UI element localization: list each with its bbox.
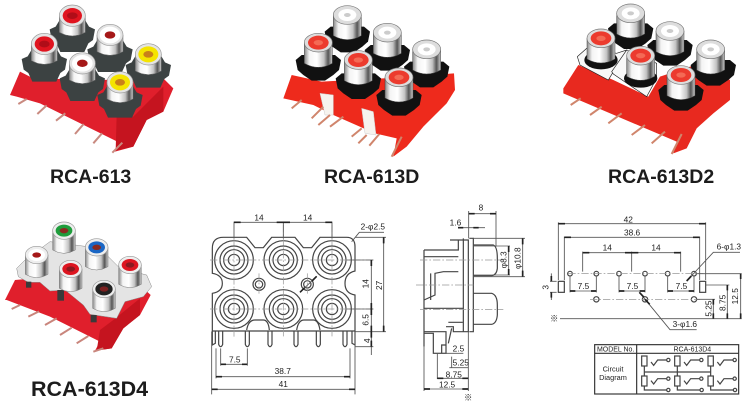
- jack outlines: [215, 241, 351, 328]
- circuit diagram table: MODEL No.: [597, 347, 634, 354]
- technical drawing: PCB hole layout: 42: [624, 215, 633, 225]
- circuit diagram table: Circuit: [603, 365, 623, 374]
- circuit diagram table: RCA-613D4: [674, 347, 711, 354]
- technical drawing: front view: 2-φ2.5: [361, 221, 385, 231]
- label: RCA-613D: RCA-613D: [324, 166, 419, 188]
- circuit diagram table: Diagram: [599, 373, 627, 382]
- technical drawing: PCB hole layout: 6-φ1.3: [717, 242, 741, 252]
- technical drawing: front view: [210, 212, 386, 394]
- product photo: RCA-613D4: [5, 222, 152, 352]
- technical drawing: front view: 4: [362, 338, 372, 343]
- product photo: RCA-613: [10, 5, 173, 153]
- technical drawing: front view: 27: [374, 280, 384, 290]
- technical drawing: PCB hole layout: 3-φ1.6: [673, 319, 697, 329]
- technical drawing: side view: ※: [464, 392, 472, 402]
- technical drawing: PCB hole layout: 14: [651, 243, 661, 253]
- technical drawing: side view: 5.25: [453, 357, 469, 367]
- product photo: RCA-613D2: [563, 4, 736, 154]
- technical drawing: PCB hole layout: 12.5: [730, 288, 740, 304]
- technical drawing: front view: 14: [254, 212, 264, 222]
- label: RCA-613D2: RCA-613D2: [608, 166, 714, 188]
- technical drawing: PCB hole layout: 8.75: [717, 294, 727, 311]
- technical drawing: PCB hole layout: 3: [541, 285, 551, 290]
- circuit diagram table: [595, 345, 739, 394]
- label: RCA-613: RCA-613: [50, 166, 131, 188]
- technical drawing: front view: 41: [279, 379, 288, 389]
- technical drawing: side view: 12.5: [439, 379, 456, 389]
- technical drawing: PCB hole layout: 5.25: [703, 300, 713, 317]
- technical drawing: side view: [416, 203, 525, 402]
- technical drawing: front view: 6.5: [361, 314, 371, 326]
- technical drawing: front view: 7.5: [229, 354, 241, 364]
- product photo: RCA-613D: [283, 6, 455, 157]
- technical drawing: side view: 1.6: [450, 218, 462, 228]
- technical drawing: PCB hole layout: 14: [603, 243, 612, 253]
- technical drawing: front view: 14: [303, 212, 313, 222]
- technical drawing: side view: 2.5: [453, 344, 465, 354]
- technical drawing: front view: 14: [361, 279, 371, 288]
- technical drawing: PCB hole layout: 38.6: [624, 228, 641, 238]
- technical drawing: PCB hole layout: 7.5: [676, 281, 688, 291]
- technical drawing: PCB hole layout: [541, 215, 742, 330]
- technical drawing: PCB hole layout: ※: [550, 313, 558, 323]
- circuit symbols: [642, 356, 737, 392]
- label: RCA-613D4: RCA-613D4: [31, 377, 148, 401]
- technical drawing: PCB hole layout: 7.5: [578, 281, 590, 291]
- technical drawing: side view: 8: [479, 203, 484, 213]
- technical drawing: side view: φ8.3: [498, 251, 508, 268]
- technical drawing: side view: φ10.8: [512, 247, 522, 269]
- technical drawing: front view: 38.7: [275, 366, 291, 376]
- technical drawing: PCB hole layout: 7.5: [627, 281, 639, 291]
- technical drawing: side view: 8.75: [446, 370, 462, 380]
